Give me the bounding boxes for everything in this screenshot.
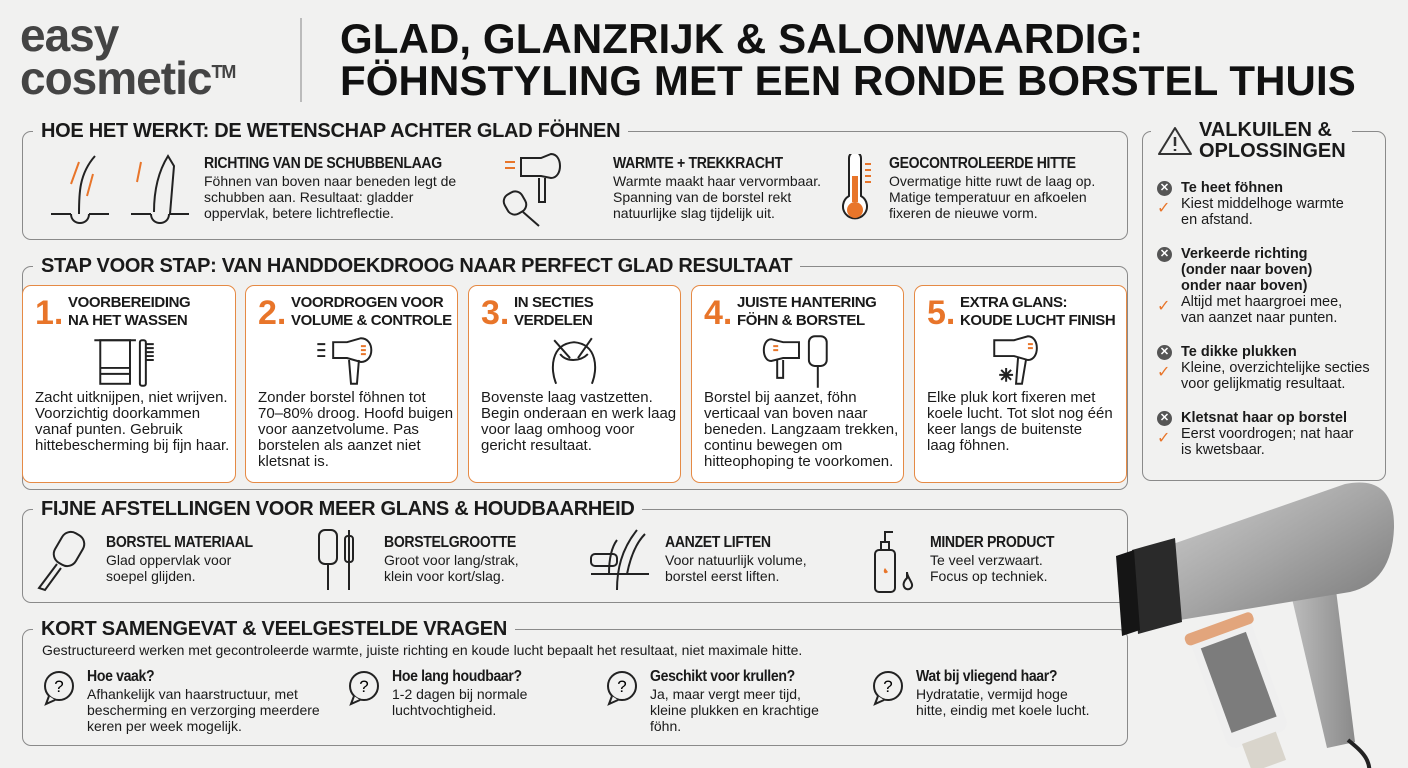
logo: easy (20, 9, 118, 61)
card: step 3: VERDELEN (514, 312, 592, 329)
card: step 2: Zonder borstel föhnen tot (258, 389, 426, 406)
card: step 1 (22, 285, 236, 483)
card: step 3: gericht resultaat. (481, 437, 592, 454)
panel: fine tuning: Te veel verzwaart. (930, 552, 1043, 568)
title: GLAD, GLANZRIJK & SALONWAARDIG: (340, 15, 1143, 62)
faq 1: keren per week mogelijk. (87, 718, 242, 734)
title (340, 15, 1356, 104)
summary text: Gestructureerd werken met gecontroleerde warmte, juiste richting en koude lucht bepaalt het resultaat, niet maximale hitte. (42, 642, 802, 658)
card: step 5: Elke pluk kort fixeren met (927, 389, 1095, 406)
faq 3: Ja, maar vergt meer tijd, (650, 686, 801, 702)
card: step 3: voor laag omhoog voor (481, 421, 634, 438)
faq 4: Hydratatie, vermijd hoge (916, 686, 1068, 702)
pitfall list: is kwetsbaar. (1181, 442, 1265, 458)
panel: how it works: Warmte maakt haar vervormbaar. Spanning van de borstel rekt natuurlijke slag tijdelijk uit. (613, 173, 821, 221)
card: step 3 (468, 285, 681, 483)
faq 1: ? (54, 677, 64, 696)
logo: cosmeticTM (20, 52, 235, 104)
card: step 4: JUISTE HANTERING (737, 294, 876, 311)
card: step 4: Borstel bij aanzet, föhn (704, 389, 857, 406)
faq 1 (44, 668, 320, 734)
icon: round brushes (318, 529, 354, 590)
card: step 5: KOUDE LUCHT FINISH (960, 312, 1115, 329)
icon: product bottle (874, 531, 914, 593)
pitfall list: Kleine, overzichtelijke secties (1181, 360, 1370, 376)
card: step 5 (914, 285, 1127, 483)
pitfall list: Verkeerde richting (1181, 246, 1308, 262)
faq 1: Hoe vaak? (87, 668, 154, 685)
heading: pitfalls: VALKUILEN & (1199, 119, 1332, 141)
card: step 1: hittebescherming bij fijn haar. (35, 437, 229, 454)
panel: fine tuning: BORSTELGROOTTE (384, 534, 516, 551)
icon: dryer and brush (502, 153, 561, 227)
card: step 3: IN SECTIES (514, 294, 593, 311)
heading: how it works: HOE HET WERKT: DE WETENSCHAP ACHTER GLAD FÖHNEN (41, 120, 620, 142)
card: step 1: 1. (35, 294, 63, 332)
card: step 1: NA HET WASSEN (68, 312, 187, 329)
faq 2: 1-2 dagen bij normale (392, 686, 527, 702)
faq 3: kleine plukken en krachtige (650, 702, 819, 718)
card: step 4: verticaal van boven naar (704, 405, 867, 422)
card: step 1: VOORBEREIDING (68, 294, 190, 311)
pitfall list: Kletsnat haar op borstel (1181, 410, 1347, 426)
pitfall list: ✓ (1157, 298, 1170, 315)
card: step 1: Zacht uitknijpen, niet wrijven. (35, 389, 228, 406)
card: step 1: Voorzichtig doorkammen (35, 405, 200, 422)
card: step 5: EXTRA GLANS: (960, 294, 1067, 311)
heading: steps: STAP VOOR STAP: VAN HANDDOEKDROOG NAAR PERFECT GLAD RESULTAAT (41, 255, 792, 277)
pitfall list: van aanzet naar punten. (1181, 310, 1337, 326)
card: step 4: 4. (704, 294, 732, 332)
icon: lifting roots (590, 529, 649, 590)
panel: how it works: RICHTING VAN DE SCHUBBENLAAG (204, 155, 442, 172)
faq 3: ? (617, 677, 627, 696)
heading: summary: KORT SAMENGEVAT & VEELGESTELDE VRAGEN (41, 618, 507, 640)
card: step 2: VOORDROGEN VOOR (291, 294, 443, 311)
pitfall list: en afstand. (1181, 212, 1253, 228)
icon: hair cuticle (51, 154, 189, 224)
pitfall list: Altijd met haargroei mee, (1181, 294, 1342, 310)
card: step 2: VOLUME & CONTROLE (291, 312, 452, 329)
pitfall list: Te heet föhnen (1181, 180, 1283, 196)
logo (20, 9, 236, 104)
panel: fine tuning: BORSTEL MATERIAAL (106, 534, 253, 551)
panel: fine tuning: AANZET LIFTEN (665, 534, 771, 551)
pitfall list: ✓ (1157, 200, 1170, 217)
heading: pitfalls: OPLOSSINGEN (1199, 140, 1346, 162)
illustration: hair dryer and round brush (1116, 482, 1394, 768)
pitfall list: (onder naar boven) (1181, 262, 1312, 278)
card: step 1: vanaf punten. Gebruik (35, 421, 183, 438)
title: FÖHNSTYLING MET EEN RONDE BORSTEL THUIS (340, 57, 1356, 104)
panel: fine tuning: Focus op techniek. (930, 568, 1048, 584)
faq 4: Wat bij vliegend haar? (916, 668, 1057, 685)
faq 2: luchtvochtigheid. (392, 702, 496, 718)
faq 4 (873, 668, 1090, 718)
panel: how it works: WARMTE + TREKKRACHT (613, 155, 783, 172)
card: step 3: 3. (481, 294, 509, 332)
card: step 5: koele lucht. Tot slot nog één (927, 405, 1113, 422)
heading: pitfalls (1151, 120, 1352, 162)
card: step 5: keer langs de buitenste (927, 421, 1082, 438)
card: step 4 (691, 285, 904, 483)
panel: fine tuning: MINDER PRODUCT (930, 534, 1054, 551)
card: step 4: hitteophoping te voorkomen. (704, 453, 893, 470)
pitfall list: voor gelijkmatig resultaat. (1181, 376, 1345, 392)
pitfall list: ✕ (1160, 182, 1169, 194)
pitfall list: Eerst voordrogen; nat haar (1181, 426, 1354, 442)
faq 1: bescherming en verzorging meerdere (87, 702, 320, 718)
panel: fine tuning: Groot voor lang/strak, (384, 552, 519, 568)
pitfall list: ✕ (1160, 346, 1169, 358)
card: step 3: Bovenste laag vastzetten. (481, 389, 653, 406)
card: step 4: FÖHN & BORSTEL (737, 312, 865, 329)
faq 3 (607, 668, 819, 734)
card: step 5: laag föhnen. (927, 437, 1010, 454)
card: step 2: voor aanzetvolume. Pas (258, 421, 419, 438)
heading: fine tuning: FIJNE AFSTELLINGEN VOOR MEER GLANS & HOUDBAARHEID (41, 498, 634, 520)
panel: fine tuning: Glad oppervlak voor (106, 552, 231, 568)
panel: fine tuning: Voor natuurlijk volume, (665, 552, 807, 568)
panel: how it works: GEOCONTROLEERDE HITTE (889, 155, 1076, 172)
card: step 2 (245, 285, 458, 483)
pitfall list: ✕ (1160, 412, 1169, 424)
card: step 2: 2. (258, 294, 286, 332)
panel: how it works (22, 131, 1128, 240)
card: step 2: 70–80% droog. Hoofd buigen (258, 405, 453, 422)
faq 3: Geschikt voor krullen? (650, 668, 795, 685)
pitfall list (1157, 180, 1370, 458)
pitfall list: ✓ (1157, 364, 1170, 381)
pitfall list: ✓ (1157, 430, 1170, 447)
panel: how it works: Föhnen van boven naar beneden legt de schubben aan. Resultaat: gladder oppervlak, betere lichtreflectie. (204, 173, 456, 221)
panel: fine tuning: klein voor kort/slag. (384, 568, 505, 584)
card: step 2: kletsnat is. (258, 453, 329, 470)
icon: paddle brush (37, 530, 86, 592)
panel: summary & FAQ (22, 629, 1128, 746)
pitfall list: Te dikke plukken (1181, 344, 1297, 360)
panel: pitfalls (1142, 131, 1386, 481)
faq 4: hitte, eindig met koele lucht. (916, 702, 1090, 718)
panel: fine tuning: soepel glijden. (106, 568, 196, 584)
pitfall list: ✕ (1160, 248, 1169, 260)
card: step 3: Begin onderaan en werk laag (481, 405, 676, 422)
card: step 2: borstelen als aanzet niet (258, 437, 421, 454)
faq 2: Hoe lang houdbaar? (392, 668, 522, 685)
panel: step by step (22, 266, 1128, 490)
card: step 4: beneden. Langzaam trekken, (704, 421, 898, 438)
faq 3: föhn. (650, 718, 681, 734)
faq 1: Afhankelijk van haarstructuur, met (87, 686, 298, 702)
panel: fine tuning: borstel eerst liften. (665, 568, 779, 584)
panel: fine tuning (22, 509, 1128, 603)
card: step 5: 5. (927, 294, 955, 332)
pitfall list: onder naar boven) (1181, 278, 1308, 294)
panel: how it works: Overmatige hitte ruwt de laag op. Matige temperatuur en afkoelen fixeren de nieuwe vorm. (889, 173, 1095, 221)
faq 4: ? (883, 677, 893, 696)
faq 2 (349, 668, 527, 718)
icon: thermometer (842, 154, 871, 220)
faq 2: ? (359, 677, 369, 696)
pitfall list: Kiest middelhoge warmte (1181, 196, 1344, 212)
card: step 4: continu bewegen om (704, 437, 842, 454)
